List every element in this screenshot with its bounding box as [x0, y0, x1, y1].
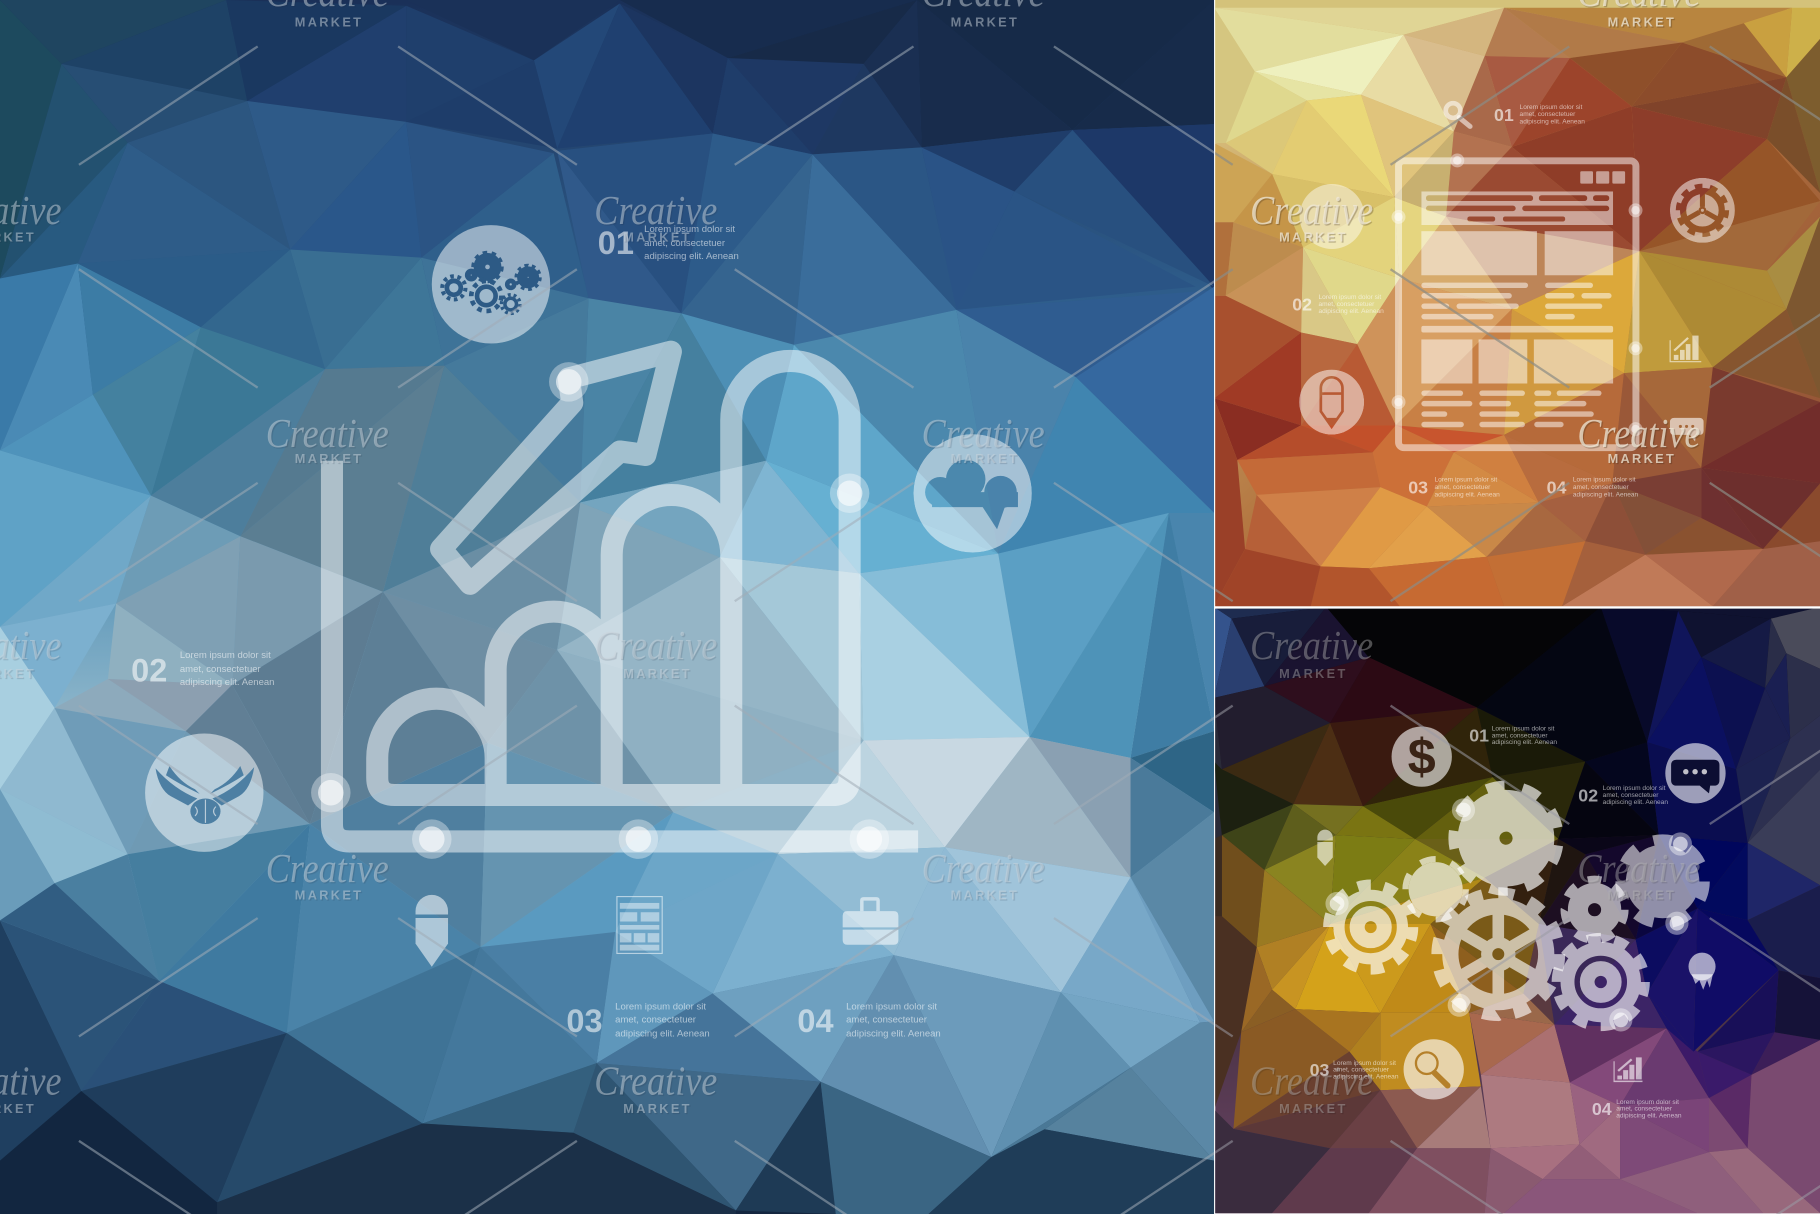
label 03: amet, consectetuer	[615, 1014, 696, 1025]
connector nodes	[311, 362, 889, 859]
icon: pencil	[1317, 830, 1333, 866]
icon: cog wheel in circle	[1670, 178, 1735, 243]
watermark logos: amber panel: Creative	[1250, 188, 1373, 234]
icon: winged brain in circle	[145, 734, 263, 852]
gear: small holed	[1564, 880, 1625, 940]
low-poly blue background	[0, 0, 1214, 1214]
watermark logos: blue panel: MARKET	[951, 15, 1017, 30]
label 02: adipiscing elit. Aenean	[180, 677, 274, 688]
label 01: adipiscing elit. Aenean	[644, 251, 739, 262]
label 02	[1292, 294, 1384, 315]
label 03: adipiscing elit. Aenean	[1333, 1073, 1399, 1080]
watermark logos: blue panel: Creative	[922, 411, 1045, 457]
label 03: adipiscing elit. Aenean	[615, 1028, 710, 1039]
watermark logos: dark panel	[1250, 623, 1700, 1116]
label 04: 04	[1592, 1099, 1612, 1119]
icon: bar chart	[1670, 336, 1701, 362]
low-poly amber background	[1214, 0, 1820, 606]
label 02	[131, 650, 274, 688]
label 02	[1578, 785, 1668, 806]
label 04: 04	[797, 1003, 834, 1039]
icon: dollar in circle	[1392, 726, 1452, 787]
label 01: Lorem ipsum dolor sit	[1492, 726, 1555, 733]
watermark logos: blue panel: Creative	[594, 623, 717, 669]
rising arrow	[441, 352, 671, 584]
label 04: amet, consectetuer	[1616, 1105, 1673, 1112]
gear cluster	[1329, 781, 1704, 1025]
label 01: adipiscing elit. Aenean	[1492, 739, 1557, 746]
icon: dollar in circle: $	[1408, 729, 1436, 785]
watermark logos: blue panel: MARKET	[295, 887, 361, 902]
label 01	[598, 224, 739, 262]
watermark logos: blue panel: Creative	[594, 1058, 717, 1104]
watermark logos: amber panel: MARKET	[1608, 451, 1674, 466]
label 04	[797, 1002, 941, 1039]
page frame	[1399, 161, 1636, 448]
label 03: 03	[1408, 477, 1428, 497]
panel: amber polygon infographic, web page layout	[1214, 0, 1820, 606]
watermark logos: dark panel: MARKET	[1608, 887, 1674, 902]
label 02: 02	[1292, 294, 1312, 314]
label 01	[1494, 104, 1585, 125]
label 04	[1592, 1099, 1682, 1119]
label 01: adipiscing elit. Aenean	[1520, 118, 1585, 125]
label 01: amet, consectetuer	[1520, 111, 1576, 118]
label 02: adipiscing elit. Aenean	[1603, 799, 1668, 806]
icon: pencil in circle	[1299, 370, 1364, 435]
gear: ringed left	[1329, 885, 1412, 969]
watermark logos: blue panel: MARKET	[623, 666, 690, 681]
label 04: amet, consectetuer	[846, 1014, 927, 1025]
watermark logos: blue panel: Creative	[922, 846, 1045, 892]
label 01: Lorem ipsum dolor sit	[1520, 104, 1582, 111]
watermark logos: amber panel: Creative	[1577, 411, 1700, 457]
gear: large plain	[1448, 781, 1564, 896]
window buttons	[1580, 171, 1625, 184]
icon: briefcase	[843, 897, 898, 945]
label 02: amet, consectetuer	[180, 664, 261, 675]
connector nodes	[1325, 798, 1692, 1031]
icon: chat bubble	[1670, 418, 1704, 442]
label 03	[1310, 1060, 1399, 1080]
label 04: Lorem ipsum dolor sit	[1573, 477, 1636, 484]
watermark logos: blue panel: MARKET	[623, 1101, 690, 1116]
icon: brain	[1689, 953, 1716, 990]
label 04: 04	[1547, 477, 1566, 497]
watermark logos: dark panel: MARKET	[1279, 1101, 1345, 1116]
panel: blue polygon infographic, growth chart	[0, 0, 1214, 1214]
watermark logos: amber panel	[1250, 0, 1700, 466]
label 02: 02	[1578, 785, 1598, 805]
watermark logos: amber panel: MARKET	[1608, 15, 1674, 30]
icon: mini web page	[617, 897, 662, 953]
label 03	[566, 1002, 710, 1039]
label 02: amet, consectetuer	[1603, 792, 1659, 799]
bar chart arches	[377, 361, 850, 795]
label 01: 01	[1494, 105, 1514, 125]
label 04: Lorem ipsum dolor sit	[846, 1002, 937, 1013]
label 01: Lorem ipsum dolor sit	[644, 224, 735, 235]
label 02: Lorem ipsum dolor sit	[180, 650, 271, 661]
watermark logos: blue panel: Creative	[594, 188, 717, 234]
label 02: 02	[131, 652, 167, 688]
label 02: amet, consectetuer	[1318, 301, 1375, 308]
label 03: Lorem ipsum dolor sit	[615, 1002, 706, 1013]
label 02: Lorem ipsum dolor sit	[1318, 294, 1381, 301]
gear: spoked wheel	[1437, 893, 1559, 1015]
web page layout icon	[1399, 161, 1636, 448]
watermark logos: blue panel: MARKET	[295, 15, 361, 30]
watermark logos: blue panel: MARKET	[623, 229, 690, 244]
watermark logos: dark panel: Creative	[1577, 846, 1700, 892]
connector nodes	[1392, 153, 1642, 436]
label 04: Lorem ipsum dolor sit	[1616, 1099, 1679, 1106]
watermark logos: amber panel: MARKET	[1279, 229, 1345, 244]
content blocks	[1421, 231, 1613, 384]
header block	[1421, 191, 1613, 225]
panel: dark multicolour polygon infographic, gears	[1214, 607, 1820, 1213]
label 04: adipiscing elit. Aenean	[1616, 1112, 1682, 1119]
label 01: 01	[598, 225, 634, 261]
watermark logos: blue panel: MARKET	[951, 887, 1017, 902]
label 03: Lorem ipsum dolor sit	[1434, 477, 1497, 484]
icon: magnifier in circle	[1404, 1039, 1464, 1100]
label 03: Lorem ipsum dolor sit	[1333, 1060, 1396, 1067]
icon: chat bubble in circle	[1665, 743, 1726, 803]
watermark logos: blue panel: MARKET	[951, 451, 1017, 466]
icon: pencil	[416, 895, 448, 967]
watermark logos: blue panel: MARKET	[295, 451, 361, 466]
watermark logos: blue panel	[0, 0, 1045, 1116]
label 01: 01	[1469, 726, 1489, 746]
label 04: amet, consectetuer	[1573, 484, 1630, 491]
low-poly dark background	[1214, 607, 1820, 1213]
gear: ringed right	[1557, 939, 1644, 1025]
gear: right solid	[1621, 840, 1704, 923]
label 01: amet, consectetuer	[1492, 732, 1548, 739]
watermark logos: blue panel: Creative	[266, 846, 389, 892]
icon: cloud speech bubble in circle	[913, 434, 1032, 552]
label 04: adipiscing elit. Aenean	[846, 1028, 941, 1039]
label 03: 03	[1310, 1060, 1329, 1080]
label 01	[1469, 726, 1557, 746]
icon: magnifier	[1446, 103, 1470, 126]
label 02: Lorem ipsum dolor sit	[1603, 785, 1666, 792]
label 03: adipiscing elit. Aenean	[1434, 491, 1500, 498]
icon: plain circle under watermark	[1300, 184, 1365, 249]
line chart icon: axes	[332, 461, 918, 841]
watermark logos: dark panel: Creative	[1250, 623, 1373, 669]
text lines	[1421, 283, 1613, 427]
label 04: adipiscing elit. Aenean	[1573, 491, 1639, 498]
label 03	[1408, 477, 1500, 498]
icon: bar chart	[1614, 1057, 1642, 1082]
watermark logos: dark panel: Creative	[1250, 1058, 1373, 1104]
label 02: adipiscing elit. Aenean	[1318, 308, 1384, 315]
label 03: 03	[566, 1003, 603, 1039]
icon: gears in circle	[432, 225, 550, 344]
label 03: amet, consectetuer	[1434, 484, 1491, 491]
label 04	[1547, 477, 1639, 498]
label 03: amet, consectetuer	[1333, 1067, 1390, 1074]
watermark logos: blue panel: Creative	[266, 411, 389, 457]
gear: small solid	[1405, 859, 1466, 919]
watermark logos: dark panel: MARKET	[1279, 666, 1345, 681]
label 01: amet, consectetuer	[644, 238, 725, 249]
